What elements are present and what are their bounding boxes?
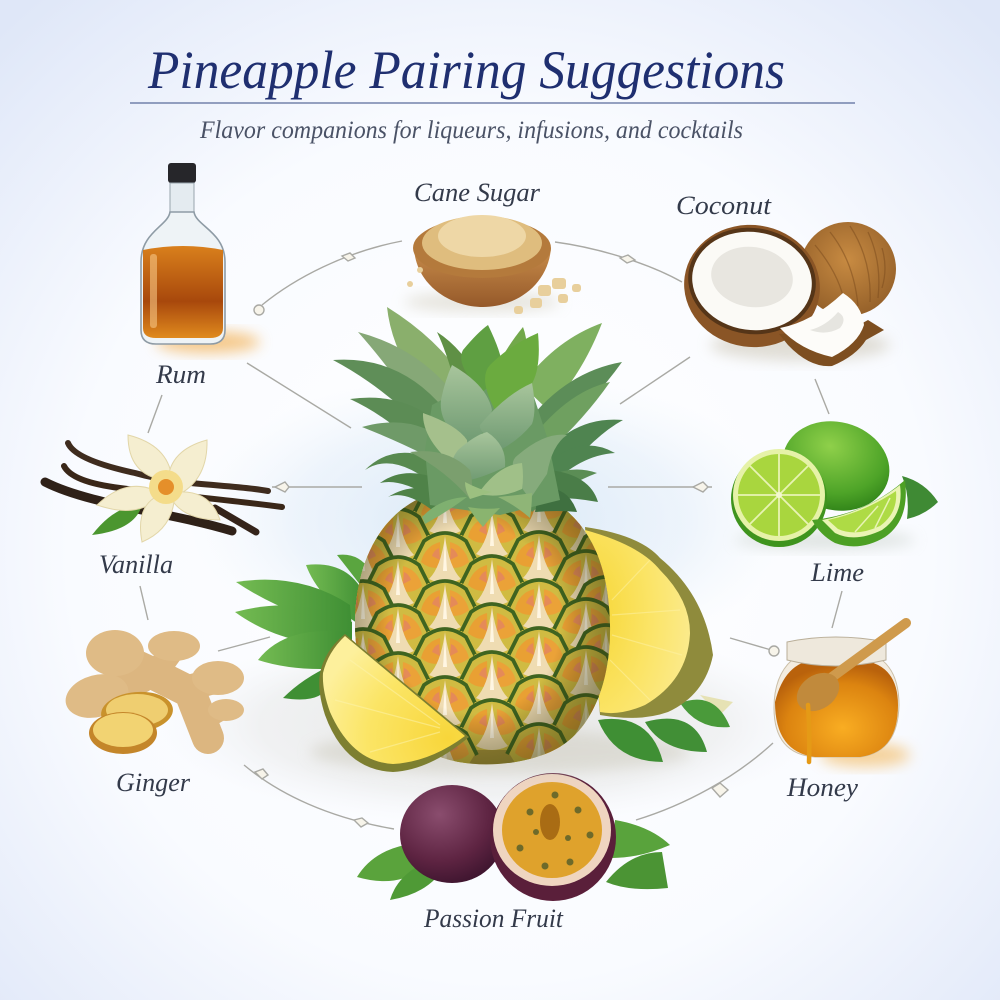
label: Vanilla: Vanilla bbox=[99, 550, 173, 579]
icon: vanilla bbox=[45, 435, 282, 542]
title: Pineapple Pairing Suggestions bbox=[147, 40, 785, 100]
label: Passion Fruit: Passion Fruit bbox=[423, 904, 564, 933]
crown back leaves bbox=[333, 307, 623, 515]
subtitle: Flavor companions for liqueurs, infusions, and cocktails bbox=[199, 117, 743, 144]
pineapple slice right bbox=[585, 527, 713, 718]
label: Ginger: Ginger bbox=[116, 768, 191, 797]
central pineapple bbox=[235, 307, 733, 775]
icon: rum bottle bbox=[141, 163, 260, 353]
crown bright top leaves bbox=[437, 325, 539, 410]
crown front leaves bbox=[410, 365, 567, 527]
connector arcs and lines bbox=[140, 241, 842, 829]
icon: ginger bbox=[61, 630, 244, 754]
icon: honey jar bbox=[774, 623, 910, 767]
label: Rum: Rum bbox=[155, 360, 206, 389]
label: Lime: Lime bbox=[810, 558, 864, 587]
pineapple wedge front bbox=[319, 634, 469, 772]
pineapple body bbox=[355, 500, 610, 764]
icon: passion fruit bbox=[357, 773, 670, 901]
label: Honey: Honey bbox=[786, 773, 858, 802]
icon: coconut bbox=[676, 216, 896, 366]
label: Cane Sugar: Cane Sugar bbox=[414, 178, 541, 207]
icon: lime bbox=[731, 410, 938, 550]
pineapple side leaves bbox=[235, 555, 733, 762]
pineapple crown bbox=[333, 307, 623, 527]
label: Coconut: Coconut bbox=[676, 191, 772, 220]
icon: cane sugar bowl bbox=[404, 215, 581, 314]
